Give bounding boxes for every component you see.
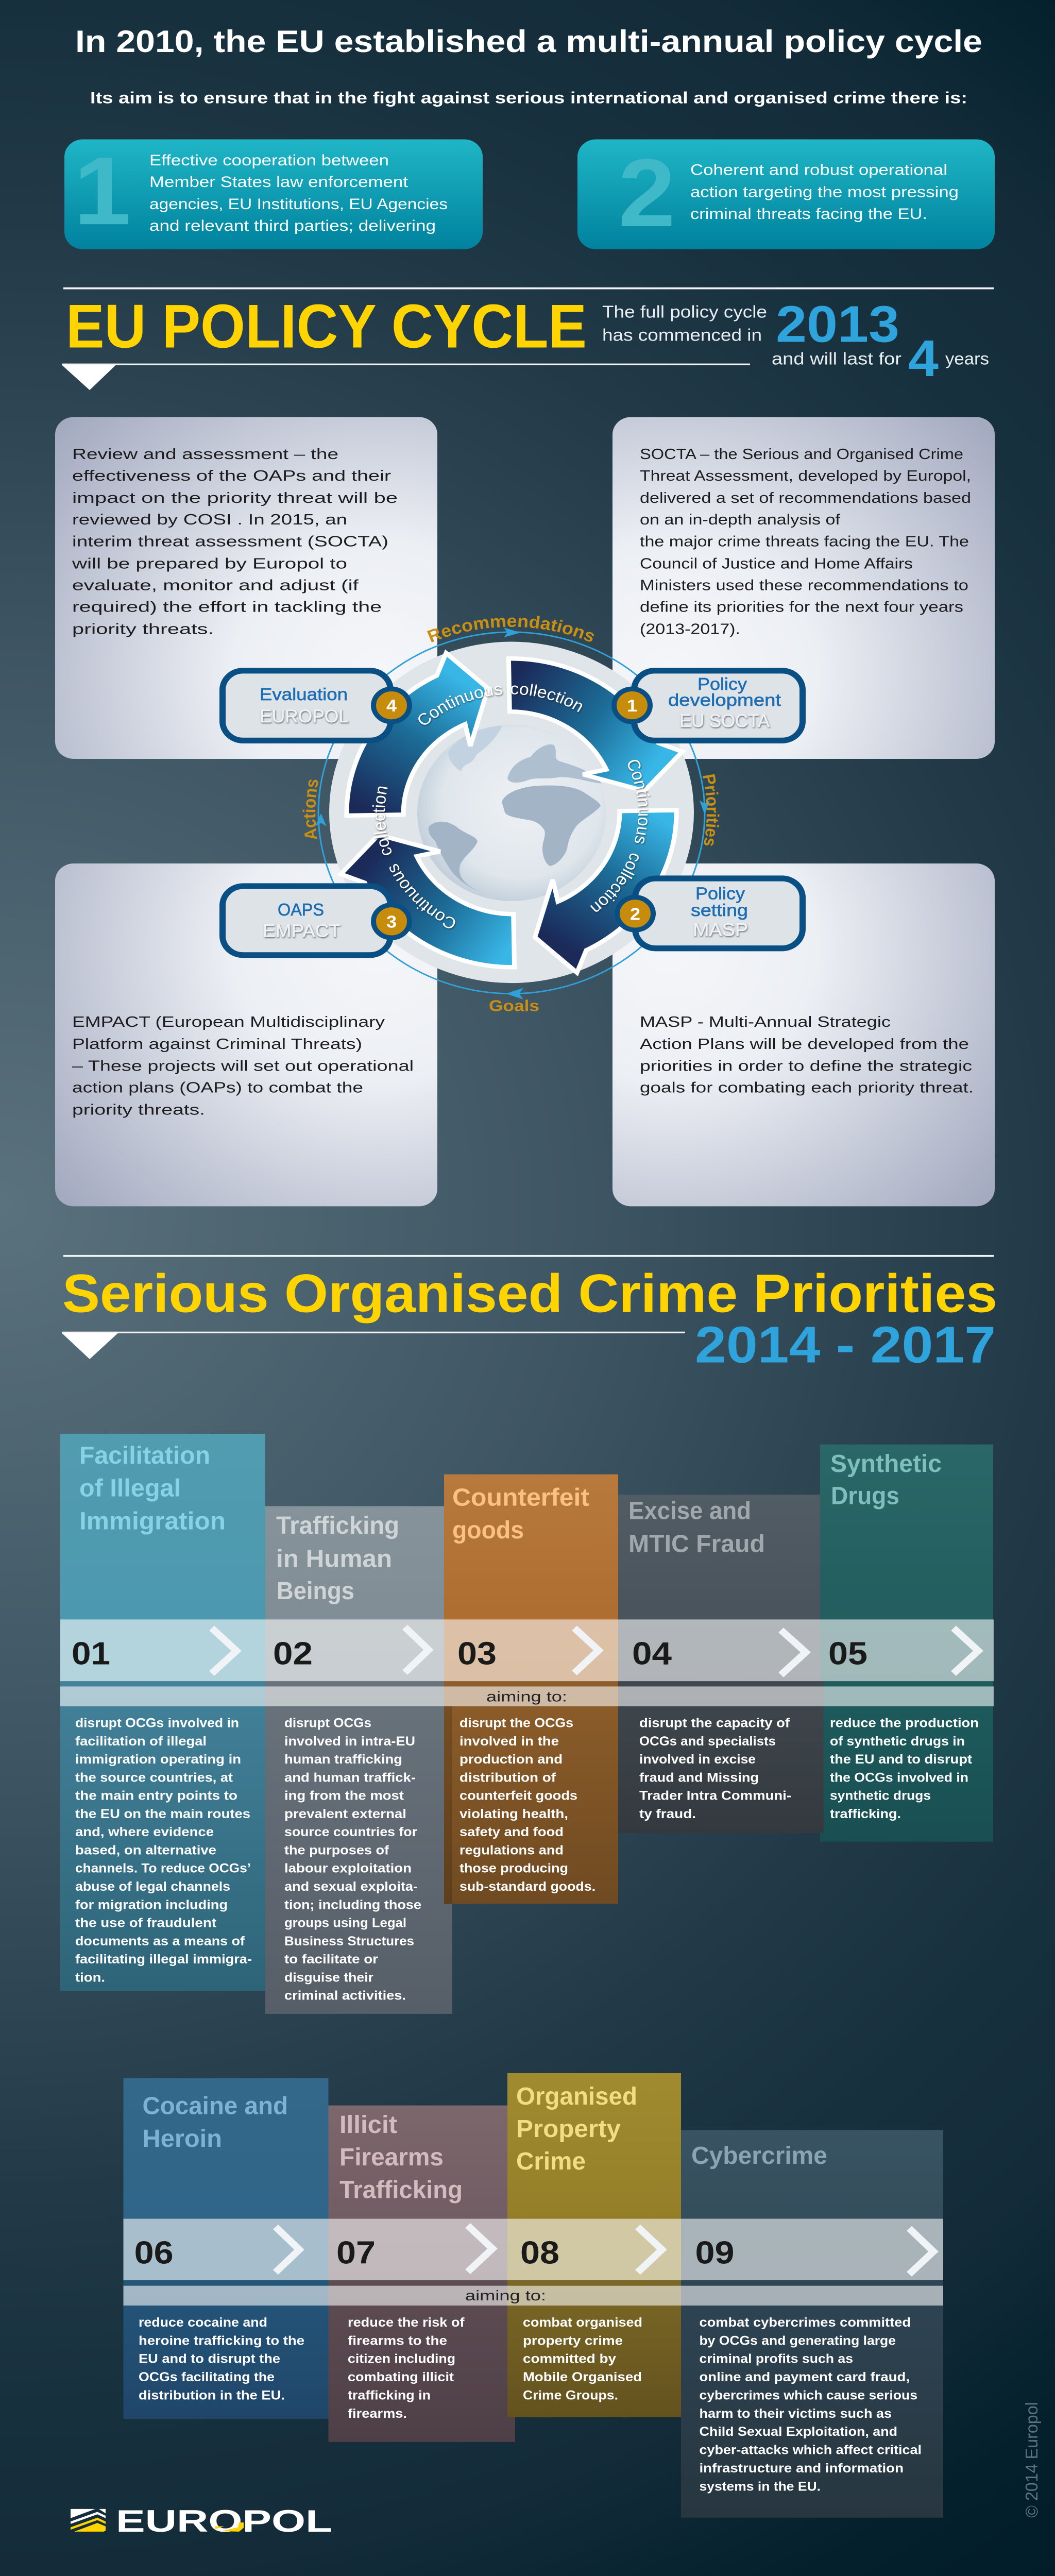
ring text: Continuous collection	[372, 786, 456, 930]
column 06: cocaine and heroin: Heroin	[142, 2124, 222, 2153]
box: OAPs: EMPACT	[263, 920, 341, 941]
number band: 02	[273, 1635, 313, 1671]
aiming band	[124, 2286, 943, 2306]
column 05: synthetic drugs: Drugs	[831, 1481, 899, 1510]
column 01: illegal immigration: Facilitation	[79, 1441, 210, 1469]
column 09: cybercrime: Cybercrime	[691, 2141, 827, 2170]
text: column 07 aim: citizen including	[348, 2351, 455, 2366]
text: column 05 aim: synthetic drugs	[830, 1788, 931, 1803]
number band	[60, 1619, 994, 1681]
column 07: illicit firearms: Trafficking	[339, 2175, 463, 2204]
aim 2 text: action targeting the most pressing	[690, 183, 959, 201]
box: policy setting: setting	[691, 901, 748, 920]
text: column 01 aim: for migration including	[75, 1897, 228, 1912]
text: column 03 aim	[460, 1715, 595, 1894]
text: column 06 aim: EU and to disrupt the	[139, 2351, 280, 2366]
text: column 01 aim: and, where evidence	[75, 1824, 214, 1839]
review text: priority threats.	[72, 621, 214, 637]
column 02: human trafficking	[265, 1506, 452, 2014]
column 07: illicit firearms	[329, 2106, 515, 2442]
text: column 01 aim: the EU on the main routes	[75, 1806, 250, 1821]
box: policy setting: MASP	[693, 920, 748, 940]
box: policy setting: 2	[630, 905, 640, 924]
logo: Europol: EUROPOL	[116, 2504, 332, 2538]
MASP text: priorities in order to define the strategic	[640, 1058, 972, 1074]
number band: 05	[828, 1635, 867, 1671]
text: column 09 aim: Child Sexual Exploitation, and	[699, 2424, 897, 2439]
column 02: human trafficking: Trafficking	[276, 1511, 399, 1539]
icon: section triangle	[62, 1333, 118, 1359]
text: column 03 aim: safety and food	[460, 1824, 564, 1839]
SOCTA text: define its priorities for the next four years	[640, 599, 963, 615]
text: column 02 aim: and human traffick-	[284, 1770, 416, 1785]
review text: interim threat assessment (SOCTA)	[72, 533, 388, 550]
text: column 07 aim	[348, 2315, 465, 2421]
aim 1 text: Member States law enforcement	[149, 173, 408, 191]
text: column 06 aim: heroine trafficking to the	[139, 2333, 304, 2348]
review text: evaluate, monitor and adjust (if	[72, 577, 359, 594]
number band: 03	[457, 1635, 497, 1671]
aim 2 text: criminal threats facing the EU.	[690, 205, 927, 223]
aiming band	[60, 1686, 994, 1706]
aim 1 text: and relevant third parties; delivering	[149, 217, 436, 234]
text: column 03 aim: those producing	[460, 1861, 568, 1876]
priorities row 1	[60, 1434, 994, 2014]
column 05: synthetic drugs	[820, 1445, 993, 1842]
text: column 09 aim: cybercrimes which cause serious	[699, 2387, 917, 2402]
review text: reviewed by COSI . In 2015, an	[72, 512, 347, 528]
arrowhead: priorities	[700, 800, 710, 815]
column 01: illegal immigration: Immigration	[79, 1506, 226, 1535]
aim 2 text: Coherent and robust operational	[690, 161, 947, 178]
column 08: organised property crime: Organised	[516, 2081, 637, 2110]
panel: EMPACT	[55, 863, 437, 1206]
MASP text: Action Plans will be developed from the	[640, 1036, 969, 1053]
MASP text	[640, 1014, 974, 1096]
copyright: © 2014 Europol	[1022, 2402, 1041, 2518]
arrowhead: recommendations	[504, 628, 521, 637]
box: policy setting	[617, 878, 803, 948]
EMPACT text: Platform against Criminal Threats)	[72, 1036, 362, 1053]
text: column 06 aim	[139, 2315, 304, 2402]
label: recommendations: Recommendations	[427, 616, 594, 642]
text: column 07 aim: trafficking in	[348, 2387, 431, 2402]
aim 1 text: agencies, EU Institutions, EU Agencies	[149, 195, 448, 213]
ring text: Continuous collection	[418, 684, 584, 726]
callout: cycle duration: The full policy cycle	[602, 302, 767, 321]
column 04: excise and MTIC fraud: Excise and	[628, 1496, 751, 1524]
text: column 03 aim: production and	[460, 1752, 563, 1767]
column 08: organised property crime: Property	[516, 2114, 621, 2143]
text: column 01 aim	[75, 1715, 252, 1985]
box: evaluation: 4	[386, 696, 397, 716]
number band	[124, 2219, 943, 2280]
text: column 02 aim: the purposes of	[284, 1842, 389, 1857]
callout: cycle duration: 2013	[776, 295, 899, 353]
icon: section triangle	[62, 365, 116, 390]
SOCTA text: SOCTA – the Serious and Organised Crime	[640, 446, 963, 463]
column 01: illegal immigration: of Illegal	[79, 1473, 181, 1502]
text: column 08 aim: combat organised	[523, 2315, 642, 2330]
column 06: cocaine and heroin: Cocaine and	[142, 2091, 288, 2120]
box: evaluation: EUROPOL	[260, 706, 349, 726]
text: column 03 aim: sub-standard goods.	[460, 1879, 595, 1894]
review text: Review and assessment – the	[72, 446, 338, 463]
text: column 01 aim: documents as a means of	[75, 1934, 245, 1948]
aiming band: aiming to:	[486, 1689, 567, 1705]
EMPACT text: action plans (OAPs) to combat the	[72, 1079, 363, 1096]
column 01: illegal immigration	[60, 1434, 265, 1991]
review text: will be prepared by Europol to	[72, 555, 347, 572]
heading: years: 2014 - 2017	[695, 1316, 996, 1374]
column 07: illicit firearms: Firearms	[339, 2143, 444, 2171]
text: column 08 aim: Crime Groups.	[523, 2387, 618, 2402]
text: column 03 aim: involved in the	[460, 1734, 559, 1749]
text: column 04 aim: OCGs and specialists	[639, 1734, 776, 1749]
review text: impact on the priority threat will be	[72, 490, 398, 506]
text: column 01 aim: abuse of legal channels	[75, 1879, 230, 1894]
text: column 02 aim: prevalent external	[284, 1806, 406, 1821]
column 03: counterfeit goods	[444, 1475, 618, 1904]
SOCTA text: Ministers used these recommendations to	[640, 577, 968, 594]
text: column 03 aim: counterfeit goods	[460, 1788, 577, 1803]
text: column 06 aim: distribution in the EU.	[139, 2387, 285, 2402]
text: column 05 aim: the OCGs involved in	[830, 1770, 968, 1785]
text: column 01 aim: based, on alternative	[75, 1842, 216, 1857]
arrow: OAPs	[341, 835, 515, 967]
column 06: cocaine and heroin	[124, 2078, 329, 2419]
priorities row 2	[124, 2073, 943, 2518]
number band: 04	[632, 1635, 672, 1671]
text: column 08 aim: property crime	[523, 2333, 623, 2348]
panel: SOCTA	[612, 417, 995, 759]
text: column 09 aim: cyber-attacks which affect critical	[699, 2442, 922, 2457]
text: column 02 aim: human trafficking	[284, 1752, 402, 1767]
number band: 08	[520, 2235, 559, 2270]
number band: 09	[695, 2235, 734, 2270]
number band: 06	[134, 2235, 174, 2270]
column 09: cybercrime	[681, 2130, 943, 2518]
number band: 07	[336, 2235, 376, 2270]
text: column 01 aim: immigration operating in	[75, 1752, 241, 1767]
heading: priorities: Serious Organised Crime Priorities	[62, 1263, 997, 1324]
panel: MASP	[612, 863, 995, 1206]
callout: cycle duration: has commenced in	[602, 326, 762, 345]
column 04: excise and MTIC fraud: MTIC Fraud	[628, 1529, 765, 1557]
box: evaluation	[223, 671, 410, 740]
text: column 09 aim: combat cybercrimes committed	[699, 2315, 911, 2330]
panel: aim 1	[64, 138, 483, 249]
column 07: illicit firearms: Illicit	[339, 2110, 397, 2139]
aim 1 text: Effective cooperation between	[149, 151, 389, 169]
icon: Europol emblem	[71, 2509, 106, 2532]
text: column 09 aim: systems in the EU.	[699, 2479, 821, 2494]
ring text: Continuous collection	[590, 759, 651, 913]
subtitle: Its aim is to ensure that in the fight against serious international and organised crime there is:	[90, 88, 967, 107]
SOCTA text: Threat Assessment, developed by Europol,	[640, 468, 971, 484]
callout: cycle duration: 4	[908, 329, 939, 387]
arrowhead: actions	[315, 814, 327, 826]
review text: required) the effort in tackling the	[72, 599, 382, 615]
arrow: policy development	[508, 658, 682, 791]
text: column 01 aim: facilitating illegal immigra-	[75, 1952, 252, 1967]
text: column 04 aim: involved in excise	[639, 1752, 756, 1767]
box: policy development: 1	[627, 696, 637, 716]
SOCTA text: Council of Justice and Home Affairs	[640, 555, 913, 572]
label: goals: Goals	[489, 996, 539, 1014]
arrow: evaluation	[347, 653, 488, 816]
text: column 03 aim: violating health,	[460, 1806, 568, 1821]
text: column 06 aim: reduce cocaine and	[139, 2315, 267, 2330]
text: column 04 aim	[639, 1715, 791, 1821]
text: column 02 aim: tion; including those	[284, 1897, 421, 1912]
arrow: policy setting	[535, 810, 676, 973]
text: column 05 aim	[830, 1715, 979, 1821]
text: column 09 aim: online and payment card fraud,	[699, 2369, 910, 2384]
review text	[72, 446, 398, 637]
text: column 08 aim: Mobile Organised	[523, 2369, 642, 2384]
text: column 04 aim: Trader Intra Communi-	[639, 1788, 791, 1803]
MASP text: goals for combating each priority threat.	[640, 1079, 974, 1096]
text: column 07 aim: combating illicit	[348, 2369, 454, 2384]
text: column 02 aim: disguise their	[284, 1970, 373, 1985]
box: OAPs: OAPS	[278, 900, 324, 920]
text: column 09 aim: criminal profits such as	[699, 2351, 853, 2366]
text: column 02 aim: criminal activities.	[284, 1988, 406, 2003]
text: column 09 aim: by OCGs and generating large	[699, 2333, 896, 2348]
SOCTA text: the major crime threats facing the EU. The	[640, 533, 969, 550]
text: column 02 aim: disrupt OCGs	[284, 1715, 371, 1730]
column 05: synthetic drugs: Synthetic	[830, 1449, 942, 1478]
text: column 04 aim: ty fraud.	[639, 1806, 696, 1821]
text: column 08 aim: committed by	[523, 2351, 616, 2366]
callout: cycle duration: and will last for	[772, 349, 901, 368]
aim 2 text	[690, 161, 959, 223]
column 02: human trafficking: in Human	[276, 1544, 392, 1572]
text: column 02 aim: Business Structures	[284, 1934, 414, 1948]
title: In 2010, the EU established a multi-annual policy cycle	[75, 25, 982, 59]
text: column 01 aim: the main entry points to	[75, 1788, 237, 1803]
box: evaluation: Evaluation	[260, 685, 348, 704]
SOCTA text	[640, 446, 971, 637]
panel: aim 2	[577, 139, 995, 249]
box: policy development: development	[668, 690, 781, 710]
logo: Europol	[71, 2504, 332, 2538]
text: column 01 aim: channels. To reduce OCGs’	[75, 1861, 251, 1876]
text: column 05 aim: of synthetic drugs in	[830, 1734, 965, 1749]
text: column 01 aim: tion.	[75, 1970, 105, 1985]
big number 1: 1	[74, 138, 131, 245]
column 08: organised property crime: Crime	[516, 2147, 586, 2175]
box: policy development	[614, 671, 803, 740]
text: column 08 aim	[523, 2315, 642, 2402]
text: column 09 aim: harm to their victims such as	[699, 2406, 892, 2421]
text: column 07 aim: reduce the risk of	[348, 2315, 465, 2330]
big number 2: 2	[618, 140, 675, 247]
box: OAPs	[223, 886, 410, 955]
box: policy setting: Policy	[695, 884, 745, 903]
column 04: excise and MTIC fraud	[618, 1495, 824, 1833]
text: column 05 aim: trafficking.	[830, 1806, 901, 1821]
text: column 02 aim: to facilitate or	[284, 1952, 378, 1967]
text: column 03 aim: disrupt the OCGs	[460, 1715, 573, 1730]
callout: cycle duration: years	[945, 349, 989, 368]
number band: 01	[72, 1635, 110, 1671]
text: column 02 aim: ing from the most	[284, 1788, 404, 1803]
text: column 07 aim: firearms to the	[348, 2333, 447, 2348]
text: column 01 aim: the source countries, at	[75, 1770, 233, 1785]
text: column 01 aim: the use of fraudulent	[75, 1915, 216, 1930]
text: column 02 aim	[284, 1715, 421, 2003]
icon: globe	[417, 725, 606, 901]
column 03: counterfeit goods: goods	[452, 1516, 524, 1544]
text: column 03 aim: regulations and	[460, 1842, 564, 1857]
aiming band: aiming to:	[465, 2288, 546, 2304]
EMPACT text: priority threats.	[72, 1101, 205, 1118]
MASP text: MASP - Multi-Annual Strategic	[640, 1014, 891, 1030]
column 03: counterfeit goods: Counterfeit	[452, 1483, 589, 1511]
diagram: policy cycle	[219, 616, 806, 1014]
heading: EU policy cycle: EU POLICY CYCLE	[66, 292, 587, 361]
text: column 07 aim: firearms.	[348, 2406, 407, 2421]
review text: effectiveness of the OAPs and their	[72, 468, 391, 484]
label: priorities: Priorities	[703, 774, 719, 846]
column 08: organised property crime	[507, 2073, 681, 2417]
ring text	[371, 683, 656, 951]
aim 1 text	[149, 151, 448, 234]
text: column 02 aim: labour exploitation	[284, 1861, 412, 1876]
text: column 09 aim: infrastructure and information	[699, 2461, 904, 2476]
column 02: human trafficking: Beings	[277, 1577, 354, 1605]
text: column 02 aim: and sexual exploita-	[284, 1879, 418, 1894]
box: OAPs: 3	[386, 912, 397, 931]
box: policy development: EU SOCTA	[679, 710, 770, 731]
EMPACT text: – These projects will set out operational	[72, 1058, 414, 1074]
icon: logo accent	[215, 2522, 244, 2532]
text: column 02 aim: groups using Legal	[284, 1915, 406, 1930]
EMPACT text	[72, 1014, 414, 1118]
SOCTA text: (2013-2017).	[640, 621, 740, 637]
text: column 06 aim: OCGs facilitating the	[139, 2369, 275, 2384]
callout: cycle duration	[602, 295, 989, 387]
text: column 09 aim	[699, 2315, 922, 2494]
text: column 04 aim: fraud and Missing	[639, 1770, 759, 1785]
text: column 02 aim: source countries for	[284, 1824, 417, 1839]
text: column 03 aim: distribution of	[460, 1770, 556, 1785]
text: column 04 aim: disrupt the capacity of	[639, 1715, 790, 1730]
EMPACT text: EMPACT (European Multidisciplinary	[72, 1014, 385, 1030]
box: policy development: Policy	[697, 674, 747, 694]
text: column 05 aim: the EU and to disrupt	[830, 1752, 972, 1767]
arrowhead: goals	[506, 988, 523, 999]
label: actions: Actions	[303, 779, 318, 839]
text: column 01 aim: disrupt OCGs involved in	[75, 1715, 239, 1730]
text: column 05 aim: reduce the production	[830, 1715, 979, 1730]
text: column 02 aim: involved in intra-EU	[284, 1734, 415, 1749]
text: column 01 aim: facilitation of illegal	[75, 1734, 207, 1749]
SOCTA text: delivered a set of recommendations based	[640, 490, 971, 506]
panel: review and assessment	[55, 417, 437, 759]
SOCTA text: on an in-depth analysis of	[640, 512, 841, 528]
